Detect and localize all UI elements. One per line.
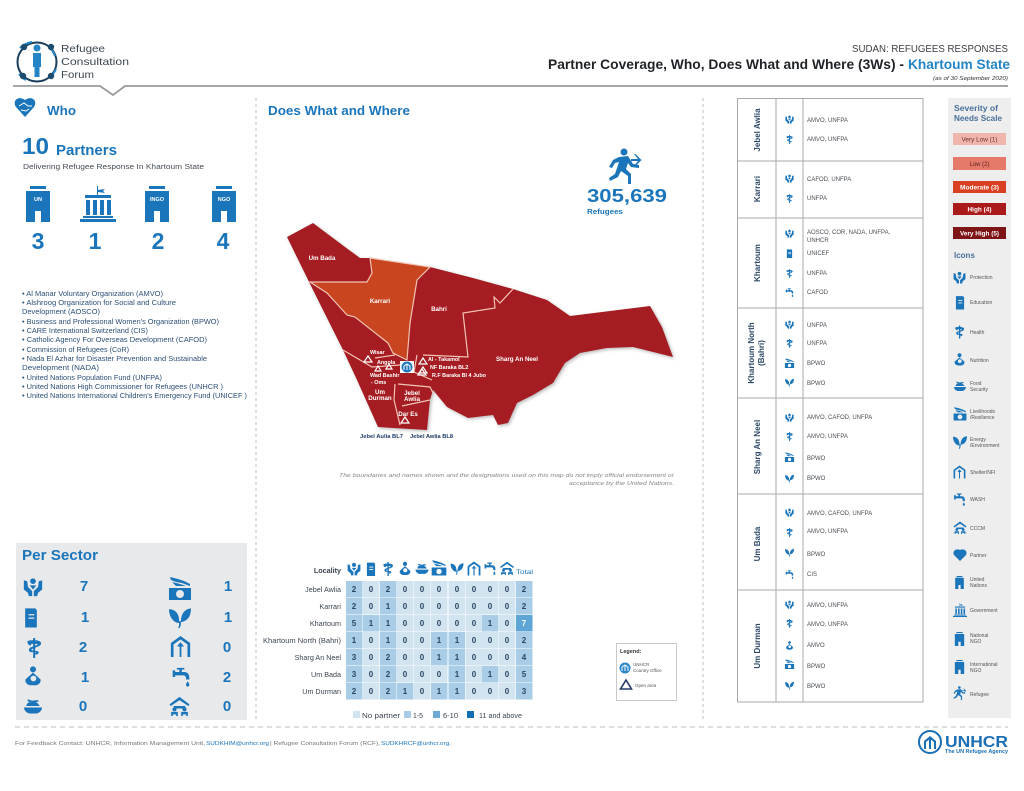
heatmap values: 0 — [420, 585, 425, 594]
locality: Um Durman: AMVO, UNFPA — [807, 603, 848, 609]
locality: Sharg An Neel: AMVO, UNFPA — [807, 434, 848, 440]
heatmap values: 0 — [420, 619, 425, 628]
locality: Karrari: Karrari — [753, 176, 762, 202]
header titles: Khartoum State — [908, 56, 1010, 72]
heatmap values — [352, 585, 527, 696]
heatmap row labels: Sharg An Neel — [295, 653, 341, 662]
header titles: Partner Coverage, Who, Does What and Where (3Ws) - — [548, 56, 904, 72]
sector: education: 1 — [81, 609, 89, 626]
panel: per sector — [16, 543, 247, 720]
map: Khartoum State localities: Bahri — [431, 306, 447, 313]
icon legend: National — [970, 633, 988, 639]
map: Khartoum State localities: Dar Es — [398, 411, 418, 418]
locality: Khartoum North (Bahri): BPWO — [807, 381, 826, 387]
icon legend: Nations — [970, 583, 987, 589]
heatmap values: 1 — [403, 687, 408, 696]
locality: Khartoum North (Bahri): Khartoum North — [747, 322, 756, 384]
partner type counts: INGO — [150, 197, 165, 203]
heatmap values: 0 — [505, 619, 510, 628]
map disclaimer: The boundaries and names shown and the designations used on this map do not imply official endorsement or — [339, 473, 675, 479]
heatmap legend: 1-5 — [413, 713, 423, 720]
heatmap values: 0 — [403, 653, 408, 662]
sector: health: 2 — [79, 639, 87, 656]
locality: Sharg An Neel: BPWO — [807, 456, 826, 462]
map: Khartoum State localities: Jebel Awlia BL8 — [410, 434, 453, 440]
partner list: • CARE International Switzerland (CIS) — [22, 327, 148, 335]
partner list: Development (NADA) — [22, 364, 99, 372]
partner list: • Alshroog Organization for Social and Culture — [22, 299, 176, 307]
sector: WASH — [173, 668, 231, 687]
logo: Refugee Consultation Forum: Refugee — [61, 43, 105, 55]
map legend box: UNHCR — [633, 662, 650, 667]
severity heading: Needs Scale — [954, 113, 1002, 123]
locality: Karrari — [753, 175, 851, 203]
icon legend: WASH — [970, 497, 985, 503]
heatmap values: 0 — [472, 585, 477, 594]
locality: Jebel Awlia: Jebel Awlia — [753, 108, 762, 152]
heatmap values: 0 — [472, 602, 477, 611]
locality: Khartoum North (Bahri) — [747, 321, 827, 387]
sector: nutrition: 1 — [81, 669, 89, 686]
heatmap values: 1 — [455, 636, 460, 645]
dividers — [256, 98, 703, 720]
icon legend: Government — [970, 608, 998, 614]
heatmap values: 0 — [505, 687, 510, 696]
heatmap values: 0 — [369, 687, 374, 696]
locality: Um Bada: AMVO, CAFOD, UNFPA — [807, 511, 872, 517]
heading: Who: Who — [47, 104, 76, 118]
severity scale: Moderate (3) — [960, 184, 999, 192]
sector: livelihoods: 1 — [224, 578, 232, 595]
icon legend: CCCM — [970, 526, 985, 532]
icon legend: Education — [970, 300, 992, 306]
icon legend: Icons — [954, 251, 975, 260]
locality: Um Bada: AMVO, UNFPA — [807, 529, 848, 535]
heatmap row labels: Jebel Awlia — [305, 585, 341, 594]
UNHCR logo — [919, 731, 1009, 755]
sector: food security: 0 — [79, 698, 87, 715]
heatmap values: 0 — [455, 619, 460, 628]
locality: Sharg An Neel: AMVO, CAFOD, UNFPA — [807, 415, 872, 421]
partner total: Partners — [56, 143, 117, 159]
footer feedback contact: SUDKHIM@unhcr.org — [206, 741, 269, 747]
UNHCR country office marker — [400, 361, 414, 373]
heatmap values: 1 — [455, 653, 460, 662]
partner type counts: UN — [34, 197, 42, 203]
heatmap values: 0 — [437, 602, 442, 611]
heatmap values: 0 — [403, 636, 408, 645]
icon legend: NGO — [970, 668, 982, 674]
map: Khartoum State localities: NF Baraka BL2 — [430, 365, 468, 371]
map: Khartoum State localities: Awlia — [404, 396, 421, 403]
heatmap values: 0 — [505, 636, 510, 645]
locality: Khartoum: UNHCR — [807, 238, 829, 244]
map: Khartoum State localities: Sharg An Neel — [496, 356, 538, 363]
heatmap values: 2 — [386, 670, 391, 679]
locality: Khartoum: UNFPA — [807, 271, 827, 277]
map legend box: Legend: — [620, 649, 642, 655]
heatmap: partners by locality and sector — [263, 560, 534, 700]
sector: health — [27, 638, 87, 658]
severity scale: High (4) — [968, 206, 992, 214]
map: Khartoum State localities: - Oms — [371, 380, 386, 386]
heatmap values: 2 — [386, 585, 391, 594]
locality: Um Bada: Um Bada — [753, 526, 762, 561]
heatmap values: 0 — [472, 670, 477, 679]
sector: CCCM — [170, 697, 231, 716]
locality: Jebel Awlia: AMVO, UNFPA — [807, 118, 848, 124]
locality: Um Bada: BPWO — [807, 552, 826, 558]
panel: severity scale and icon legend — [948, 98, 1011, 718]
severity scale: Very Low (1) — [962, 136, 998, 144]
heatmap values: 1 — [386, 636, 391, 645]
map: Khartoum State localities: Wisar — [370, 350, 386, 356]
partner list — [22, 290, 247, 400]
sector: education — [25, 608, 89, 628]
locality: Karrari: UNFPA — [807, 196, 827, 202]
heatmap values: 2 — [386, 687, 391, 696]
heatmap values: 0 — [403, 602, 408, 611]
map: Khartoum State localities: Angola — [377, 360, 396, 366]
heatmap values: 1 — [369, 619, 374, 628]
heatmap values: 2 — [352, 602, 357, 611]
heatmap header icons: Locality — [314, 566, 341, 575]
heatmap values: 0 — [403, 670, 408, 679]
heatmap legend: No partner — [362, 713, 401, 720]
heatmap values: 0 — [437, 585, 442, 594]
locality: Um Bada: CIS — [807, 572, 817, 578]
locality: Khartoum: AOSCO, COR, NADA, UNFPA, — [807, 230, 891, 236]
heatmap values: 1 — [437, 636, 442, 645]
icon legend: Refugee — [970, 692, 989, 698]
table: activities by locality — [738, 98, 923, 702]
icon legend: Energy — [970, 437, 986, 443]
heatmap values: 2 — [352, 687, 357, 696]
heatmap row labels: Um Durman — [302, 687, 341, 696]
map legend box: Country Office — [633, 668, 662, 673]
panel: per sector: Per Sector — [22, 548, 98, 564]
severity heading — [954, 103, 1002, 123]
icon legend: NGO — [970, 639, 982, 645]
partner total — [22, 133, 204, 171]
heatmap cells — [346, 581, 532, 700]
map: Khartoum State localities: Jebel — [404, 390, 420, 397]
heatmap values: 0 — [505, 602, 510, 611]
heatmap values: 7 — [522, 619, 527, 628]
map legend box — [616, 644, 676, 700]
header titles — [548, 44, 1010, 82]
sector: WASH: 2 — [223, 669, 231, 686]
partner type counts: 4 — [217, 228, 230, 254]
heatmap values: 0 — [369, 602, 374, 611]
icon legend: /Resilience — [970, 415, 995, 421]
severity scale — [953, 133, 1006, 239]
heatmap header icons: Total — [516, 569, 534, 576]
heatmap values: 1 — [386, 602, 391, 611]
heading: Who — [15, 98, 76, 118]
heatmap values: 0 — [420, 636, 425, 645]
heatmap values: 0 — [420, 670, 425, 679]
sector: shelter: 0 — [223, 639, 231, 656]
locality: Khartoum North (Bahri): UNFPA — [807, 341, 827, 347]
partner list: • Catholic Agency For Overseas Development (CAFOD) — [22, 336, 207, 344]
icon legend: Protection — [970, 275, 993, 281]
heatmap values: 0 — [420, 602, 425, 611]
heatmap values: 0 — [505, 585, 510, 594]
locality: Khartoum: UNICEF — [807, 251, 830, 257]
locality: Khartoum North (Bahri): UNFPA — [807, 323, 827, 329]
heatmap values: 0 — [369, 653, 374, 662]
partner list: • United Nations Population Fund (UNFPA) — [22, 374, 162, 382]
footer feedback contact: SUDKHRCF@unhcr.org. — [381, 741, 451, 747]
partner type counts: NGO — [218, 197, 231, 203]
locality: Um Bada — [753, 509, 872, 579]
heatmap values: 0 — [369, 636, 374, 645]
partner list: • Nada El Azhar for Disaster Prevention and Sustainable — [22, 355, 207, 363]
sector: food security — [24, 698, 87, 715]
heatmap values: 1 — [488, 670, 493, 679]
partner list: • Al Manar Voluntary Organization (AMVO) — [22, 290, 163, 298]
heatmap values: 0 — [472, 636, 477, 645]
heatmap values: 4 — [522, 653, 527, 662]
heatmap values: 0 — [472, 619, 477, 628]
footer feedback contact — [15, 741, 451, 747]
locality: Khartoum: CAFOD — [807, 290, 829, 296]
icon legend: International — [970, 662, 998, 668]
sector: shelter — [171, 636, 231, 657]
icon legend: Shelter/NFI — [970, 470, 995, 476]
icon legend: Livelihoods — [970, 409, 996, 415]
locality: Khartoum — [753, 230, 891, 297]
icon legend: Food — [970, 381, 982, 387]
logo: Refugee Consultation Forum: Consultation — [61, 56, 129, 68]
heatmap values: 0 — [488, 585, 493, 594]
heatmap values: 1 — [455, 670, 460, 679]
heatmap legend: 6-10 — [443, 713, 458, 720]
locality: Sharg An Neel: Sharg An Neel — [753, 420, 762, 474]
locality: Jebel Awlia — [753, 108, 848, 152]
partner list: Development (AOSCO) — [22, 308, 100, 316]
heatmap legend: 11 and above — [479, 713, 522, 720]
heatmap header icons — [314, 560, 534, 576]
refugee total: 305,639 — [587, 186, 667, 206]
open area sites — [364, 356, 427, 423]
locality: Khartoum North (Bahri): (Bahri) — [757, 340, 766, 366]
heatmap values: 2 — [522, 636, 527, 645]
heatmap row labels: Khartoum — [310, 619, 341, 628]
locality: Um Durman: BPWO — [807, 684, 826, 690]
heatmap values: 0 — [472, 653, 477, 662]
locality: Khartoum: Khartoum — [753, 244, 762, 282]
icon legend: Security — [970, 387, 989, 393]
heatmap values: 1 — [386, 619, 391, 628]
locality: Um Durman: Um Durman — [753, 623, 762, 669]
heatmap values: 0 — [488, 636, 493, 645]
logo: Refugee Consultation Forum: Forum — [61, 69, 94, 81]
heatmap values: 0 — [488, 653, 493, 662]
icon legend: /Environment — [970, 443, 1000, 449]
severity heading: Severity of — [954, 103, 998, 113]
partner total: Delivering Refugee Response In Khartoum State — [23, 164, 204, 171]
heatmap values: 0 — [455, 585, 460, 594]
icon legend: Partner — [970, 553, 987, 559]
map: Khartoum State localities: Wad Bashir — [370, 373, 400, 379]
sector: nutrition — [25, 666, 89, 686]
partner total: 10 — [22, 133, 49, 159]
partner list: • United Nations High Commissioner for Refugees (UNHCR ) — [22, 383, 223, 391]
partner type counts: 2 — [152, 228, 164, 254]
locality labels: Um Bada — [309, 255, 336, 262]
heatmap values: 2 — [386, 653, 391, 662]
heatmap values: 1 — [455, 687, 460, 696]
partner type counts: 3 — [32, 228, 44, 254]
sector: energy: 1 — [224, 609, 232, 626]
heatmap row labels: Karrari — [319, 602, 341, 611]
heatmap values: 0 — [437, 670, 442, 679]
heatmap values: 3 — [522, 687, 527, 696]
header titles: SUDAN: REFUGEES RESPONSES — [852, 44, 1008, 55]
sector: protection: 7 — [80, 578, 88, 595]
locality: Um Durman: AMVO — [807, 643, 825, 649]
heatmap values: 0 — [437, 619, 442, 628]
heatmap values: 5 — [522, 670, 527, 679]
icon legend: Health — [970, 330, 985, 336]
heatmap values: 3 — [352, 653, 357, 662]
locality boundaries — [310, 258, 513, 425]
heatmap values: 3 — [352, 670, 357, 679]
footer feedback contact: | Refugee Consultation Forum (RCF), — [270, 741, 380, 747]
header titles: (as of 30 September 2020) — [933, 76, 1008, 82]
heatmap values: 0 — [505, 653, 510, 662]
locality: Sharg An Neel: BPWO — [807, 476, 826, 482]
icon legend — [953, 251, 1000, 700]
heatmap values: 0 — [403, 619, 408, 628]
UNHCR logo: UNHCR — [945, 734, 1008, 751]
heatmap values: 0 — [488, 602, 493, 611]
partner list: • Business and Professional Women's Organization (BPWO) — [22, 318, 219, 326]
locality: Um Durman — [753, 601, 848, 690]
heatmap values: 0 — [369, 585, 374, 594]
heatmap values: 0 — [472, 687, 477, 696]
sector: livelihoods — [169, 577, 232, 600]
UNHCR logo: The UN Refugee Agency — [945, 749, 1009, 755]
severity scale: Low (2) — [970, 161, 990, 168]
heatmap row labels: Khartoum North (Bahri) — [263, 636, 341, 645]
partner list: • Commission of Refugees (CoR) — [22, 346, 129, 354]
sector: CCCM: 0 — [223, 698, 231, 715]
sector: protection — [24, 578, 88, 596]
heatmap values: 2 — [522, 585, 527, 594]
map: Khartoum State localities: Durman — [368, 395, 392, 402]
locality: Khartoum North (Bahri): BPWO — [807, 361, 826, 367]
locality: Karrari — [310, 258, 430, 360]
heatmap values: 0 — [488, 687, 493, 696]
locality: Um Durman: AMVO, UNFPA — [807, 622, 848, 628]
map: Khartoum State localities: Al - Takamol — [428, 357, 460, 363]
partner type counts — [26, 186, 236, 254]
heatmap values: 0 — [420, 653, 425, 662]
map: Khartoum State localities — [287, 223, 673, 440]
map: Khartoum State localities: Karrari — [370, 298, 390, 305]
map: Khartoum State localities: Um — [375, 389, 385, 396]
heatmap values: 1 — [437, 653, 442, 662]
southern site labels: Jebel Aulia BL7 — [360, 434, 403, 440]
footer feedback contact: For Feedback Contact: UNHCR, Information Management Unit, — [15, 741, 205, 747]
icon legend: Nutrition — [970, 358, 989, 364]
heatmap values: 0 — [455, 602, 460, 611]
map disclaimer: acceptance by the United Nations. — [569, 481, 674, 487]
map: Khartoum State localities: R.F Baraka Bl 4 Jubo — [432, 373, 487, 379]
locality: Jebel Awlia: AMVO, UNFPA — [807, 137, 848, 143]
heatmap values: 1 — [352, 636, 357, 645]
refugee total: Refugees — [587, 207, 623, 216]
heatmap values: 2 — [522, 602, 527, 611]
heatmap values: 0 — [505, 670, 510, 679]
map legend box: Open area — [635, 683, 657, 688]
heatmap values: 0 — [420, 687, 425, 696]
heatmap values: 0 — [369, 670, 374, 679]
heatmap legend — [353, 711, 522, 720]
heatmap values: 5 — [352, 619, 357, 628]
map disclaimer — [339, 473, 675, 487]
heatmap row labels: Um Bada — [311, 670, 341, 679]
heatmap values: 0 — [403, 585, 408, 594]
sector: energy — [169, 608, 232, 628]
refugee total — [587, 148, 667, 216]
header rule with chevron — [13, 86, 1008, 95]
logo: Refugee Consultation Forum — [18, 42, 129, 82]
heatmap row labels — [263, 585, 341, 696]
heatmap values: 1 — [437, 687, 442, 696]
partner type counts: 1 — [89, 228, 102, 254]
severity scale: Very High (5) — [960, 230, 999, 238]
locality: Karrari: CAFOD, UNFPA — [807, 177, 851, 183]
heading: Does What and Where: Does What and Where — [268, 103, 410, 118]
heatmap values: 1 — [488, 619, 493, 628]
locality: Sharg An Neel — [753, 414, 872, 483]
partner list: • United Nations International Children's Emergency Fund (UNICEF ) — [22, 392, 247, 400]
icon legend: United — [970, 577, 985, 583]
locality: Um Durman: BPWO — [807, 664, 826, 670]
heatmap values: 2 — [352, 585, 357, 594]
